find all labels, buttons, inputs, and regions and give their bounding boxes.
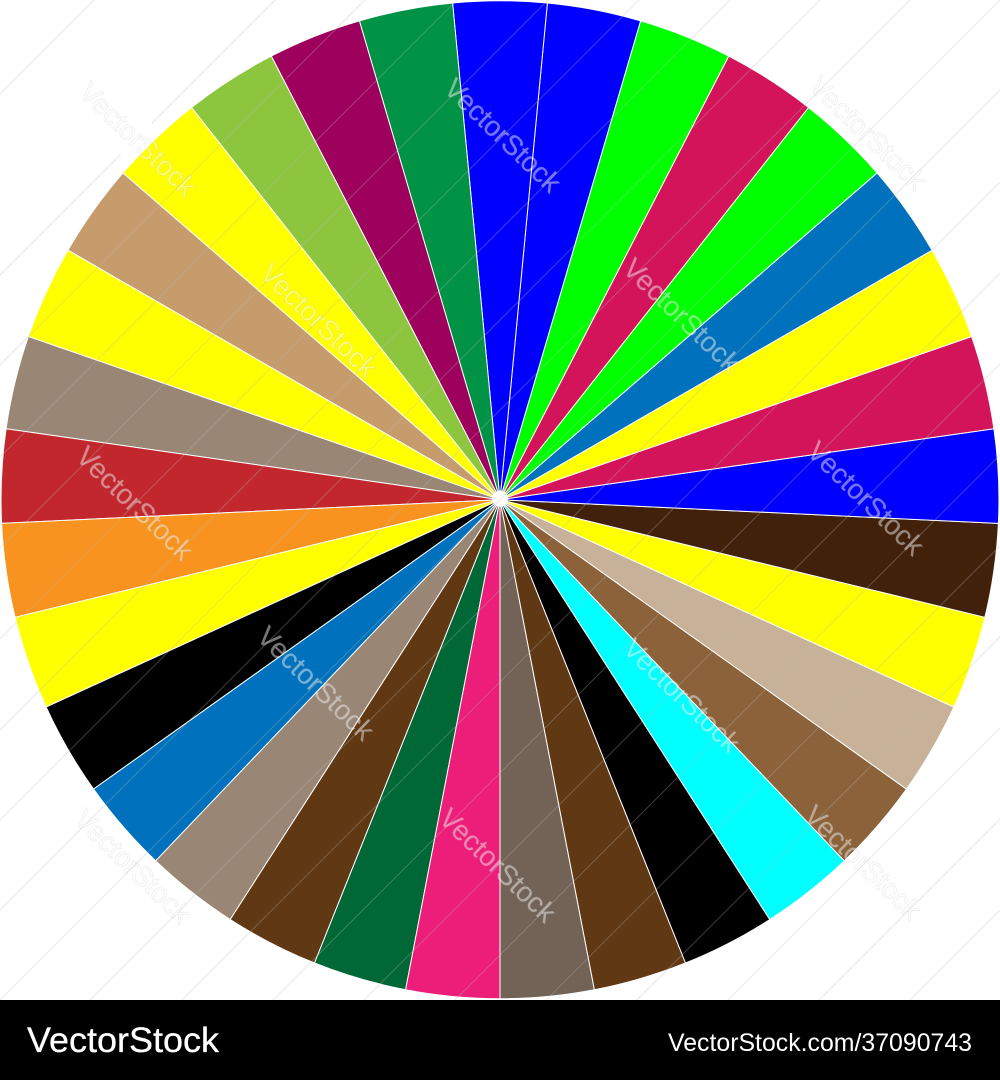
watermark text grid: VectorStock — [803, 70, 933, 197]
slice: black — [46, 500, 500, 789]
slice: purple — [271, 21, 500, 500]
slice: taupe — [156, 500, 500, 920]
slice: blue — [453, 1, 547, 500]
slice: dark brown — [500, 500, 998, 617]
watermark text grid: VectorStock — [617, 632, 747, 759]
watermark text grid: VectorStock — [617, 252, 747, 379]
slice: taupe — [6, 336, 500, 500]
slice: orange — [2, 500, 500, 617]
footer image id: VectorStock.com/37090743 — [668, 1030, 972, 1057]
watermark text grid: VectorStock — [73, 76, 203, 203]
watermark text grid: VectorStock — [70, 440, 200, 567]
slice: brown — [230, 500, 500, 963]
slice: red — [1, 429, 500, 523]
slice: black — [500, 500, 770, 963]
slice: yellow — [500, 250, 972, 500]
watermark text grid: VectorStock — [798, 799, 928, 926]
slice: light green — [192, 56, 500, 500]
slice: pink — [406, 500, 500, 999]
slice: crimson — [500, 56, 808, 500]
slice: lime — [500, 108, 877, 500]
slice: green — [359, 3, 500, 500]
slice: grey brown — [500, 500, 594, 999]
footer bar — [0, 1000, 1000, 1080]
slice: light tan — [500, 500, 954, 789]
watermark text grid: VectorStock — [801, 435, 931, 562]
slice: yellow — [28, 250, 500, 500]
watermark text grid — [68, 70, 933, 930]
watermark text grid: VectorStock — [251, 620, 381, 747]
watermark text grid: VectorStock — [254, 257, 384, 384]
slice: tan — [68, 173, 500, 500]
slice: cyan — [500, 500, 844, 920]
slice: blue — [500, 3, 641, 500]
watermark text grid: VectorStock — [433, 802, 563, 929]
slice: blue — [500, 429, 999, 523]
watermark text grid: VectorStock — [438, 72, 568, 199]
watermark text grid: VectorStock — [68, 803, 198, 930]
slice: medium blue — [94, 500, 500, 861]
centre white hub — [492, 490, 508, 506]
slice: crimson — [500, 336, 994, 500]
slice: medium blue — [500, 173, 932, 500]
slice: medium brown — [500, 500, 906, 861]
footer logo text: VectorStock — [27, 1021, 220, 1060]
slice: yellow — [15, 500, 500, 707]
slice: brown — [500, 500, 686, 990]
slice: yellow — [500, 500, 985, 707]
slice: lime — [500, 21, 729, 500]
slice: yellow — [123, 108, 500, 500]
slice: dark green — [314, 500, 500, 990]
